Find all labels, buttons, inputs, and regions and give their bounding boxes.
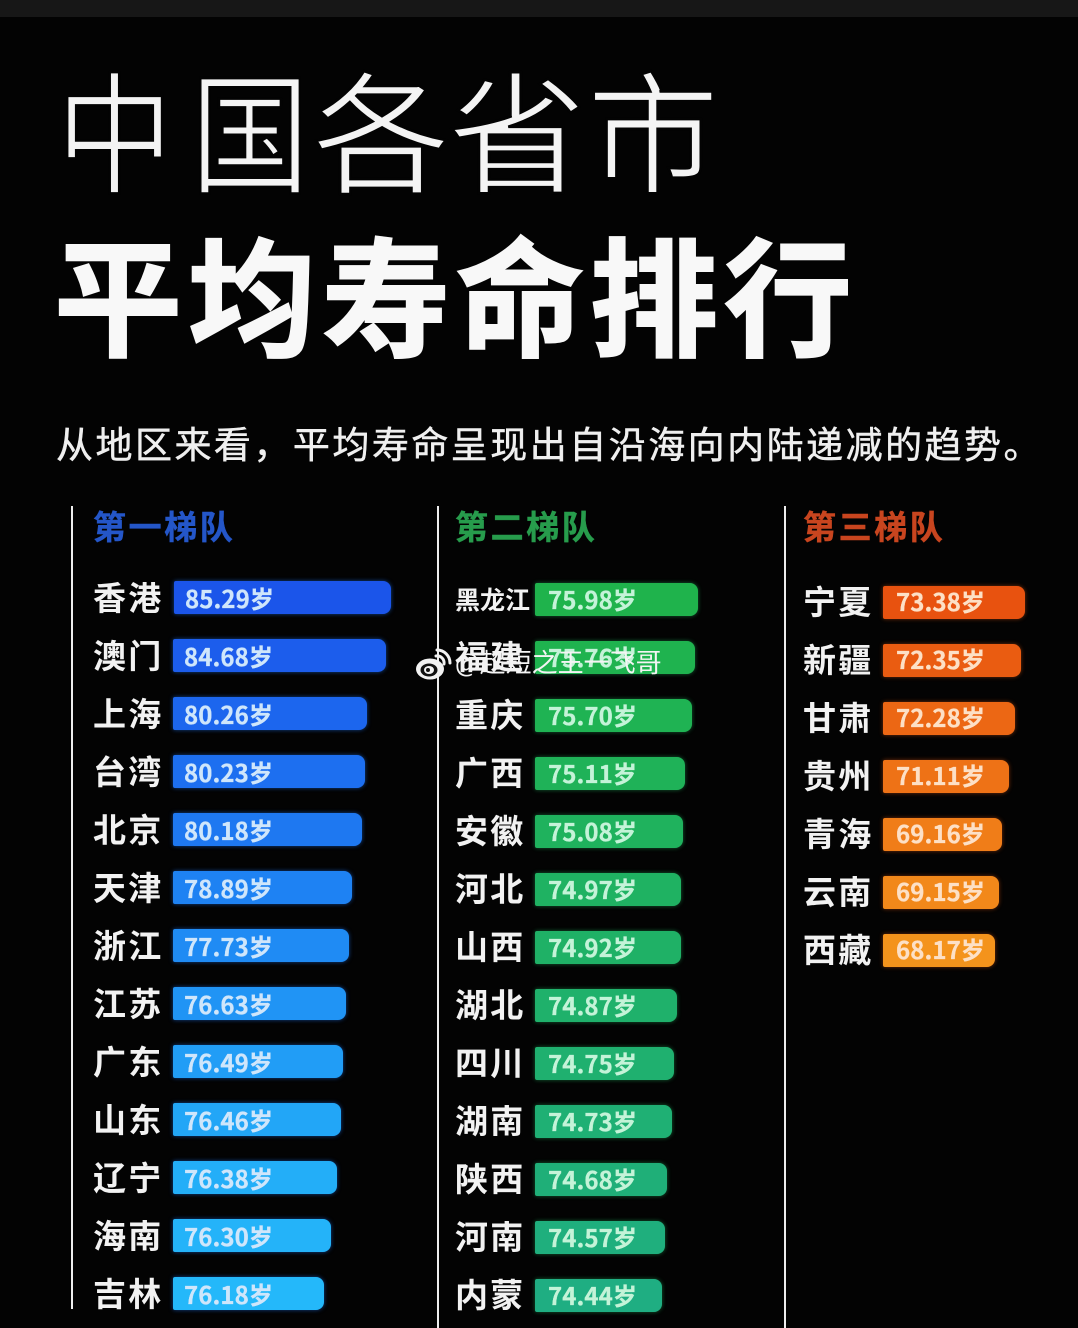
row: 广东: 广东 (93, 1036, 163, 1084)
row: 青海: 69.16岁 (896, 815, 985, 850)
row: 四川: 74.75岁 (548, 1045, 637, 1080)
row: 江苏: 江苏 (93, 978, 163, 1026)
subtitle: 从地区来看，平均寿命呈现出自沿海向内陆递减的趋势。 (56, 415, 1043, 469)
row: 河南 (455, 1211, 668, 1259)
divider: second column (437, 506, 439, 1328)
row: 浙江 (93, 920, 352, 968)
row: 甘肃 (803, 692, 1018, 740)
row: 江苏: 76.63岁 (184, 986, 273, 1021)
row: 海南 (93, 1210, 334, 1258)
row: 山西: 74.92岁 (548, 929, 637, 964)
row: 山东: 山东 (93, 1094, 163, 1142)
row: 湖南 (455, 1095, 674, 1143)
row: 新疆: 新疆 (803, 634, 873, 682)
row: 内蒙: 内蒙 (455, 1269, 525, 1317)
row: 山西 (455, 921, 684, 969)
row: 陕西: 陕西 (455, 1153, 525, 1201)
row: 福建 (455, 631, 698, 679)
row: 浙江: 77.73岁 (184, 928, 273, 963)
row: 陕西: 74.68岁 (548, 1161, 637, 1196)
row: 天津: 78.89岁 (184, 870, 273, 905)
row: 新疆: 72.35岁 (896, 641, 985, 676)
divider: third column (784, 506, 786, 1328)
row: 宁夏: 73.38岁 (896, 583, 985, 618)
row: 台湾: 台湾 (93, 746, 163, 794)
row: 吉林: 吉林 (93, 1268, 163, 1316)
row: 天津: 天津 (93, 862, 163, 910)
row: 山西: 山西 (455, 921, 525, 969)
row: 上海 (93, 688, 370, 736)
title: line one: 中 (56, 31, 174, 222)
row: 黑龙江: 75.98岁 (548, 581, 637, 616)
row: 湖北: 74.87岁 (548, 987, 637, 1022)
row: 湖南: 74.73岁 (548, 1103, 637, 1138)
row: 广东: 76.49岁 (184, 1044, 273, 1079)
heading: third tier: 第三梯队 (803, 501, 945, 549)
panel: third tier (803, 501, 1028, 972)
row: 内蒙: 74.44岁 (548, 1277, 637, 1312)
row: 江苏 (93, 978, 349, 1026)
row: 湖北: 湖北 (455, 979, 525, 1027)
row: 河南: 74.57岁 (548, 1219, 637, 1254)
row: 甘肃: 72.28岁 (896, 699, 985, 734)
row: 河北: 74.97岁 (548, 871, 637, 906)
row: 澳门 (93, 630, 389, 678)
row: 福建: 75.76岁 (548, 639, 637, 674)
row: 广东 (93, 1036, 346, 1084)
row: 山东: 76.46岁 (184, 1102, 273, 1137)
panel: first tier (93, 501, 394, 1316)
row: 宁夏 (803, 576, 1028, 624)
row: 青海: 青海 (803, 808, 873, 856)
title: line one: 市 (587, 31, 719, 222)
row: 福建: 福建 (455, 631, 525, 679)
title: line two: 平均寿命排行 (54, 198, 858, 383)
row: 湖南: 湖南 (455, 1095, 525, 1143)
row: 西藏: 西藏 (803, 924, 873, 972)
row: 海南: 76.30岁 (184, 1218, 273, 1253)
row: 广西: 广西 (455, 747, 525, 795)
row: 河南: 河南 (455, 1211, 525, 1259)
row: 贵州 (803, 750, 1012, 798)
row: 河北: 河北 (455, 863, 525, 911)
row: 辽宁: 辽宁 (93, 1152, 163, 1200)
row: 云南: 69.15岁 (896, 873, 985, 908)
row: 宁夏: 宁夏 (803, 576, 873, 624)
row: 香港: 85.29岁 (185, 580, 274, 615)
row: 香港 (93, 572, 394, 620)
panel: second tier (455, 501, 700, 1317)
row: 山东 (93, 1094, 344, 1142)
row: 台湾: 80.23岁 (184, 754, 273, 789)
row: 内蒙 (455, 1269, 664, 1317)
title: line one: 省 (447, 31, 587, 222)
row: 辽宁: 76.38岁 (184, 1160, 273, 1195)
row: 安徽: 安徽 (455, 805, 525, 853)
icon: weibo logo (416, 648, 452, 680)
row: 黑龙江 (455, 580, 700, 618)
row: 甘肃: 甘肃 (803, 692, 873, 740)
row: 云南: 云南 (803, 866, 873, 914)
row: 湖北 (455, 979, 680, 1027)
row: 澳门: 澳门 (93, 630, 163, 678)
row: 北京: 北京 (93, 804, 163, 852)
row: 台湾 (93, 746, 368, 794)
row: 辽宁 (93, 1152, 340, 1200)
heading: first tier: 第一梯队 (93, 501, 235, 549)
watermark (416, 643, 662, 680)
row: 陕西 (455, 1153, 670, 1201)
row: 广西 (455, 747, 688, 795)
row: 云南 (803, 866, 1002, 914)
row: 海南: 海南 (93, 1210, 163, 1258)
row: 吉林: 76.18岁 (184, 1276, 273, 1311)
row: 西藏: 68.17岁 (896, 931, 985, 966)
row: 安徽 (455, 805, 686, 853)
row: 北京 (93, 804, 365, 852)
row: 安徽: 75.08岁 (548, 813, 637, 848)
row: 重庆: 重庆 (455, 689, 525, 737)
row: 上海: 80.26岁 (184, 696, 273, 731)
row: 北京: 80.18岁 (184, 812, 273, 847)
row: 天津 (93, 862, 355, 910)
title: line one: 各 (312, 31, 450, 222)
row: 重庆 (455, 689, 694, 737)
row: 重庆: 75.70岁 (548, 697, 637, 732)
row: 西藏 (803, 924, 998, 972)
row: 四川: 四川 (455, 1037, 525, 1085)
title: line one: 国 (190, 31, 311, 222)
row: 四川 (455, 1037, 676, 1085)
row: 青海 (803, 808, 1005, 856)
row: 贵州: 贵州 (803, 750, 873, 798)
row: 河北 (455, 863, 684, 911)
divider: first column (71, 506, 73, 1309)
row: 香港: 香港 (93, 572, 163, 620)
row: 贵州: 71.11岁 (896, 757, 985, 792)
row: 澳门: 84.68岁 (184, 638, 273, 673)
row: 黑龙江: 黑龙江 (455, 581, 530, 617)
heading: second tier: 第二梯队 (455, 501, 597, 549)
row: 新疆 (803, 634, 1024, 682)
top status bar (0, 0, 1078, 17)
row: 吉林 (93, 1268, 327, 1316)
row: 广西: 75.11岁 (548, 755, 637, 790)
row: 浙江: 浙江 (93, 920, 163, 968)
title: line one (56, 31, 719, 222)
row: 上海: 上海 (93, 688, 163, 736)
watermark text: @超短之王一飞哥 (455, 643, 662, 680)
